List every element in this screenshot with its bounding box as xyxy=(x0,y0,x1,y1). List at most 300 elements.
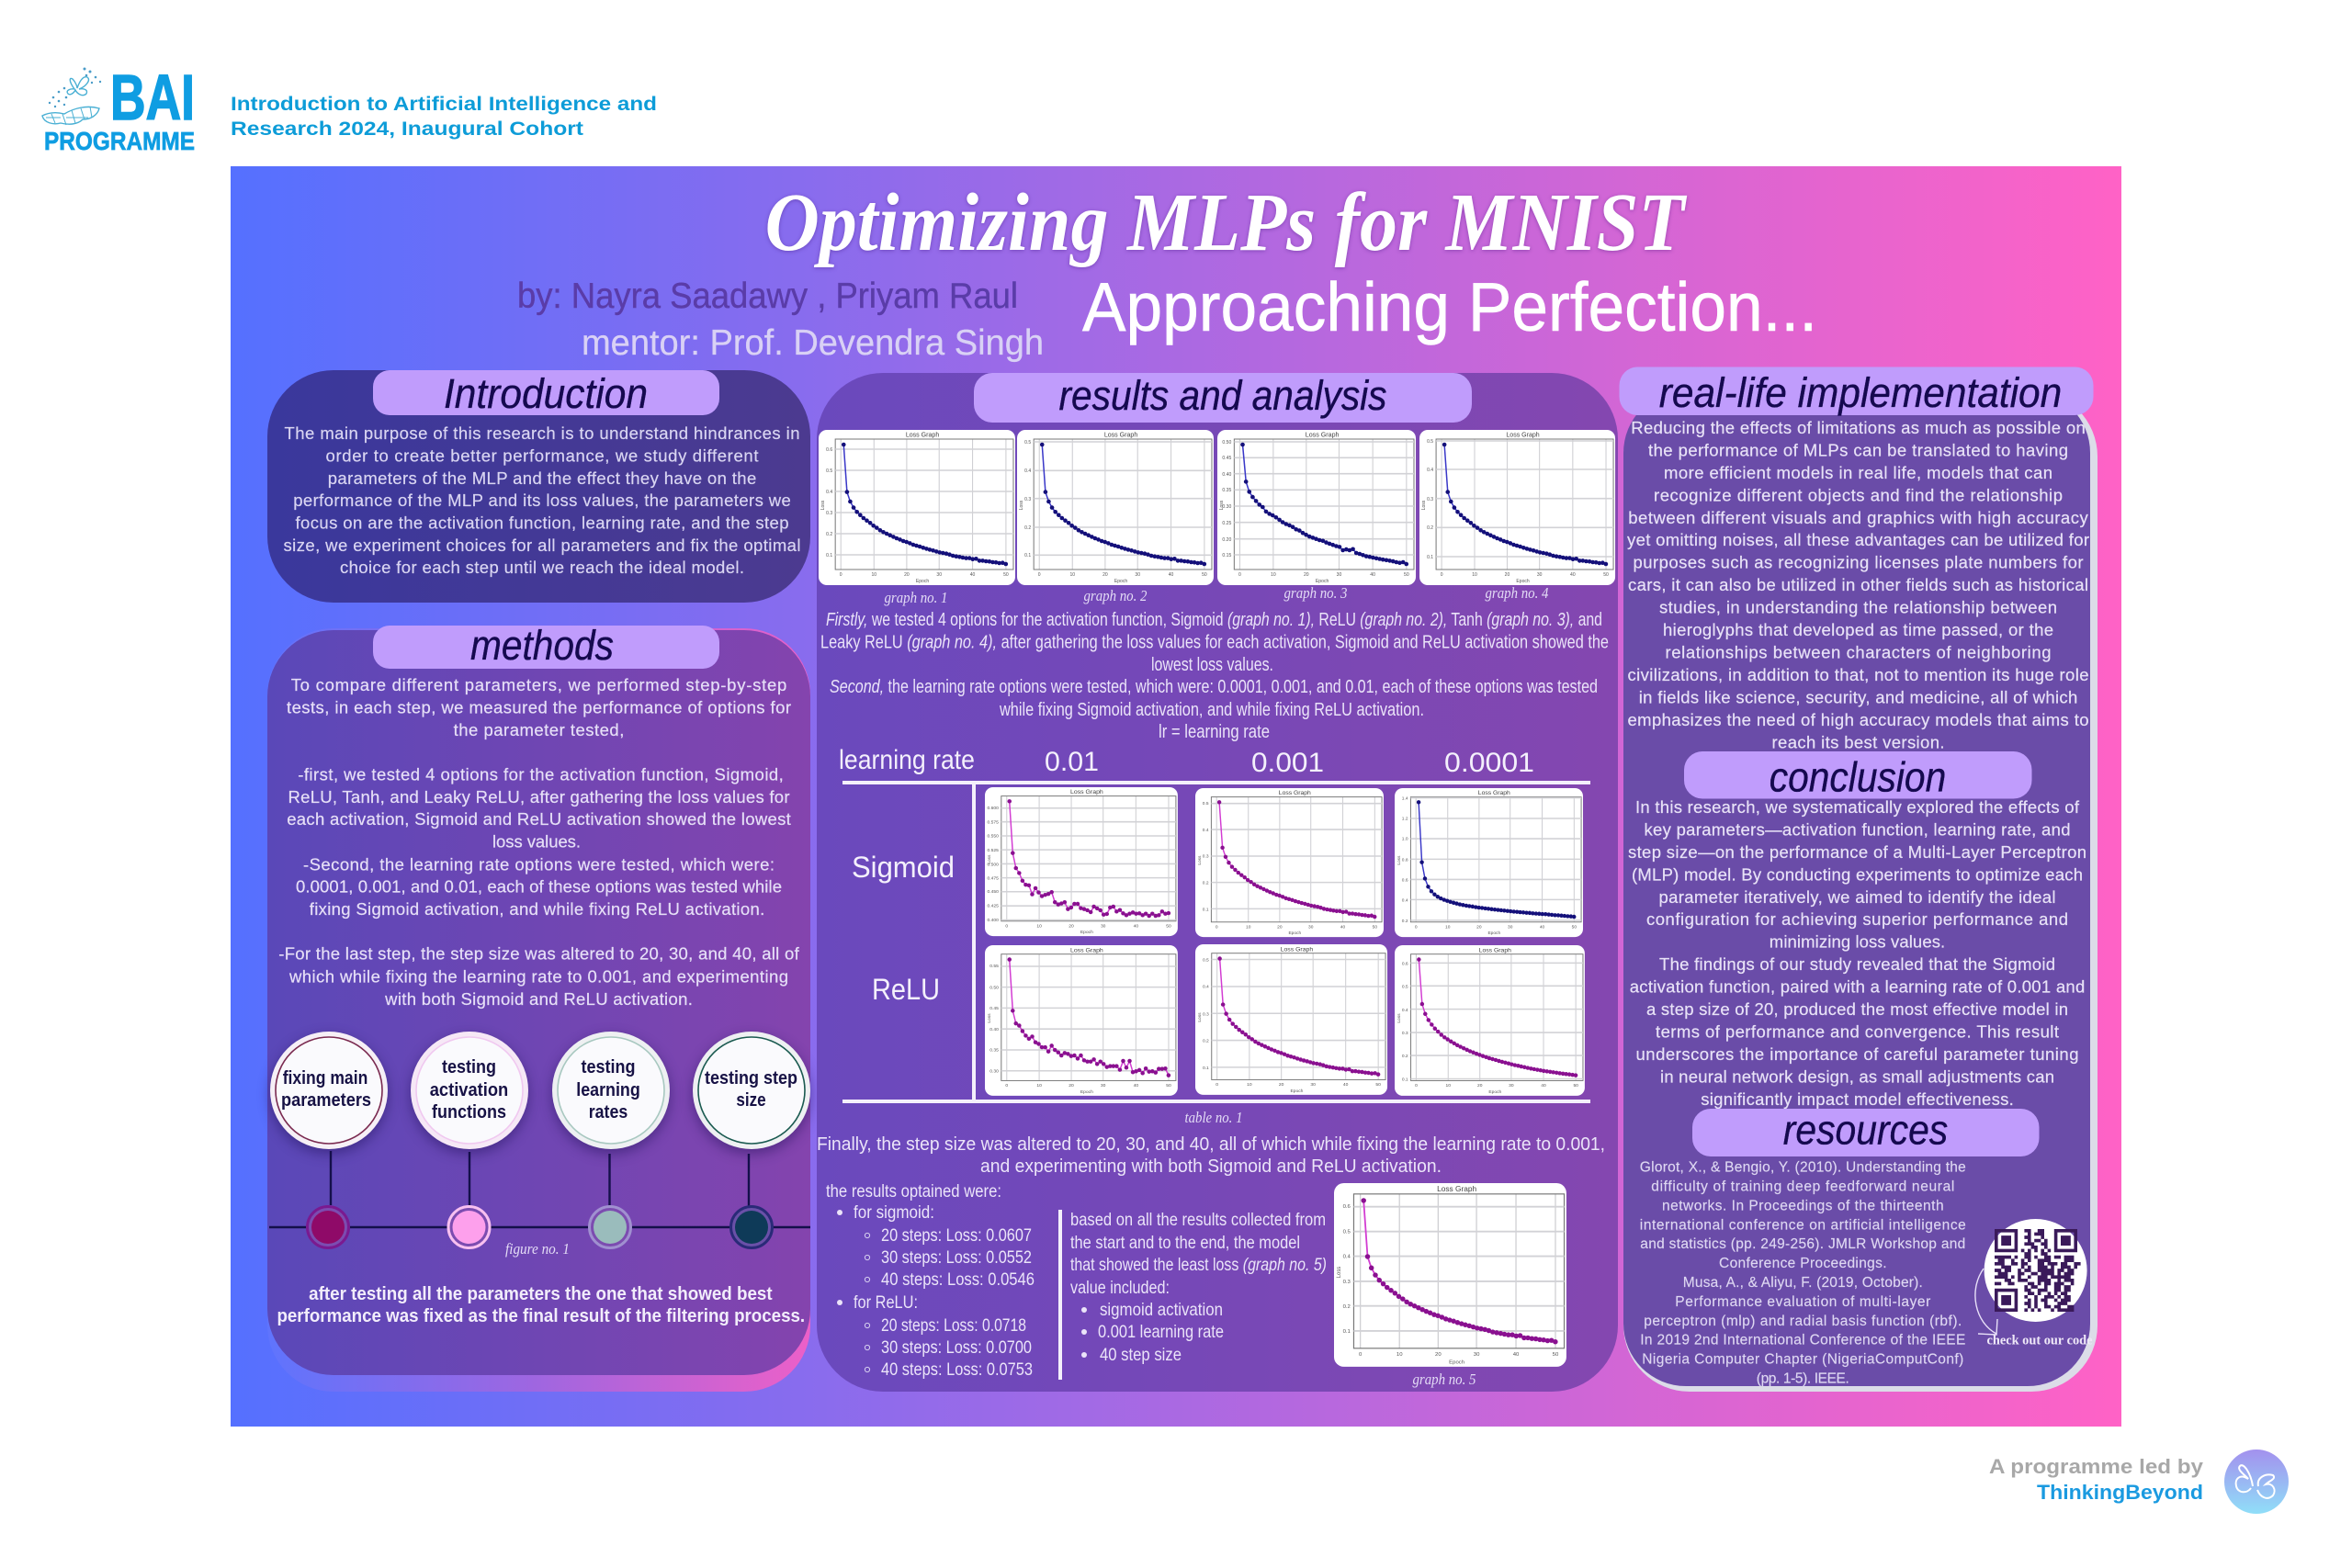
heading: Introduction: Introduction xyxy=(444,370,648,417)
chart: graph no. 3 xyxy=(1217,430,1416,585)
chart: sigmoid lr 0.001: Loss Graph xyxy=(1279,790,1311,796)
chart: graph no. 4: 0.4 xyxy=(1427,468,1433,473)
chart: sigmoid lr 0.0001 xyxy=(1395,788,1583,937)
step 2: testing activation functions: activation xyxy=(430,1080,508,1100)
chart: sigmoid lr 0.001: 20 xyxy=(1277,924,1283,930)
chart: relu lr 0.0001: 30 xyxy=(1509,1083,1514,1089)
chart: sigmoid lr 0.0001: 30 xyxy=(1508,924,1513,930)
panel: real-life, conclusion and resources xyxy=(1619,367,2098,1392)
heading: methods: methods xyxy=(470,622,614,669)
step 1: fixing main parameters: fixing main xyxy=(283,1068,368,1089)
step 4: testing step size: testing step xyxy=(705,1068,797,1089)
text: references xyxy=(1640,1160,1966,1387)
chart: sigmoid lr 0.01: 0.400 xyxy=(987,918,999,923)
text: methods body: ReLU, Tanh, and Leaky ReLU, after gathering the loss values for xyxy=(288,787,790,807)
caption: figure no. 1: figure no. 1 xyxy=(505,1240,570,1258)
chart: relu lr 0.0001: Epoch xyxy=(1488,1089,1502,1095)
chart: sigmoid lr 0.001: Epoch xyxy=(1288,931,1301,936)
text: methods body: loss values. xyxy=(492,832,581,852)
captions: graphs 1 to 4: graph no. 2 xyxy=(1084,587,1148,604)
chart: relu lr 0.01: 0.35 xyxy=(989,1047,999,1053)
heading: real-life implementation: real-life implementation xyxy=(1659,369,2062,416)
chart: graph no. 2: 0.1 xyxy=(1024,553,1031,558)
chart: sigmoid lr 0.01: 0.500 xyxy=(987,862,999,867)
chart: sigmoid lr 0.01: 0.550 xyxy=(987,834,999,840)
chart: graph no. 3: 0.45 xyxy=(1222,456,1231,461)
step 4: testing step size xyxy=(693,1032,810,1247)
chart: relu lr 0.0001: Loss Graph xyxy=(1479,947,1511,953)
text: references: Performance evaluation of multi-layer xyxy=(1675,1294,1930,1310)
text: real-life implementation body: studies, in understanding the relationship between xyxy=(1659,598,2057,617)
footer: programme credit xyxy=(1989,1450,2289,1514)
chart: graph no. 3: 0.35 xyxy=(1222,488,1231,493)
chart: graph no. 1: 50 xyxy=(1003,572,1009,578)
chart: relu lr 0.0001: 10 xyxy=(1446,1083,1451,1089)
text: conclusion body: step size—on the performance of a Multi-Layer Perceptron xyxy=(1628,842,2086,862)
chart: graph no. 1: 30 xyxy=(936,572,942,578)
chart: relu lr 0.01 xyxy=(985,945,1178,1096)
panel: methods xyxy=(267,622,810,1392)
chart: sigmoid lr 0.0001: 0.6 xyxy=(1402,878,1408,884)
chart: graph no. 2: Epoch xyxy=(1114,579,1127,584)
chart: graph no. 2: 0.3 xyxy=(1024,497,1031,502)
text: introduction body: order to create better performance, we study different xyxy=(325,446,759,465)
chart: relu lr 0.0001: 0.4 xyxy=(1402,1008,1408,1013)
step 2: testing activation functions xyxy=(411,1032,528,1247)
chart: sigmoid lr 0.001: 10 xyxy=(1246,924,1251,930)
text: conclusion body: configuration for achieving superior performance and xyxy=(1646,909,2068,929)
chart: sigmoid lr 0.001: 50 xyxy=(1373,924,1377,930)
chart: relu lr 0.01: 10 xyxy=(1036,1083,1042,1089)
text: references: and statistics (pp. 249-256). JMLR Workshop and xyxy=(1640,1236,1965,1252)
heading: results and analysis xyxy=(974,372,1472,423)
table header row: 0.001 xyxy=(1251,748,1324,778)
chart: relu lr 0.001: 0.1 xyxy=(1203,1066,1209,1071)
chart: relu lr 0.01: Loss xyxy=(987,1013,992,1023)
text: introduction body: choice for each step until we reach the ideal model. xyxy=(340,558,744,577)
chart: sigmoid lr 0.001: 0 xyxy=(1216,924,1218,930)
text: ThinkingBeyond: ThinkingBeyond xyxy=(2037,1481,2203,1504)
chart: relu lr 0.0001: 40 xyxy=(1541,1083,1546,1089)
chart: sigmoid lr 0.01: 0.600 xyxy=(987,806,999,811)
captions: graphs 1 to 4: graph no. 4 xyxy=(1485,584,1549,602)
chart: graph no. 1: 0 xyxy=(840,572,842,578)
text: references: Musa, A., & Aliyu, F. (2019, October). xyxy=(1683,1275,1923,1291)
list: results obtained: 40 steps: Loss: 0.0753 xyxy=(881,1359,1033,1380)
authors: by: Nayra Saadawy , Priyam Raul xyxy=(517,276,1018,316)
table header row: 0.01 xyxy=(1045,747,1099,777)
text: real-life implementation body: cars, it can also be utilized in other fields such as historical xyxy=(1628,575,2088,594)
chart: sigmoid lr 0.01: 50 xyxy=(1166,924,1171,929)
chart: graph no. 2: Loss Graph xyxy=(1104,433,1137,438)
chart: graph no. 1: 20 xyxy=(904,572,910,578)
chart: graph no. 4: 0.1 xyxy=(1427,555,1433,560)
text: methods body: each activation, Sigmoid and ReLU activation showed the lowest xyxy=(287,809,791,829)
text: methods body: tests, in each step, we measured the performance of options for xyxy=(287,698,791,717)
chart: relu lr 0.001: 10 xyxy=(1247,1082,1252,1088)
step 2: testing activation functions: testing xyxy=(442,1057,496,1077)
chart: relu lr 0.001 xyxy=(1195,944,1387,1095)
step 2: testing activation functions: functions xyxy=(432,1102,506,1122)
text: methods body: the parameter tested, xyxy=(454,720,624,739)
step 1: fixing main parameters: parameters xyxy=(281,1090,371,1111)
chart: sigmoid lr 0.0001: 1.0 xyxy=(1402,837,1408,842)
heading: conclusion: conclusion xyxy=(1770,753,1946,801)
chart: sigmoid lr 0.0001: 40 xyxy=(1540,924,1545,930)
chart: sigmoid lr 0.0001: 1.4 xyxy=(1402,795,1408,801)
chart: graph no. 1: 0.6 xyxy=(826,447,832,453)
chart: relu lr 0.0001 xyxy=(1395,945,1585,1096)
title: Optimizing MLPs for MNIST xyxy=(764,177,1687,268)
logo wordmark PROGRAMME: PROGRAMME xyxy=(44,127,195,155)
chart: graph no. 5: Epoch xyxy=(1449,1359,1464,1365)
arrow: QR pointer xyxy=(1975,1269,1997,1335)
header subtitle xyxy=(231,94,657,140)
chart: relu lr 0.001: 0.3 xyxy=(1203,1012,1209,1018)
chart: sigmoid lr 0.001: 0.5 xyxy=(1203,801,1209,807)
chart: graph no. 4: Loss Graph xyxy=(1506,433,1540,438)
text: activation and learning rate description: while fixing Sigmoid activation, and while fixing ReLU activation. xyxy=(999,700,1424,720)
chart: sigmoid lr 0.0001: 0.8 xyxy=(1402,858,1408,863)
chart: graph no. 2: Loss xyxy=(1019,500,1024,510)
text: methods body: -For the last step, the step size was altered to 20, 30, and 40, all of xyxy=(278,944,800,964)
text: conclusion body: The findings of our study revealed that the Sigmoid xyxy=(1659,954,2055,974)
list: results obtained: for sigmoid: xyxy=(854,1202,934,1223)
chart: graph no. 5: Loss Graph xyxy=(1437,1184,1477,1193)
chart: sigmoid lr 0.01: Epoch xyxy=(1080,930,1093,935)
heading: results and analysis: results and analysis xyxy=(1058,372,1387,419)
chart: sigmoid lr 0.001: 30 xyxy=(1308,924,1314,930)
text: real-life implementation body: between different visuals and graphics with high accuracy xyxy=(1628,508,2089,527)
chart: relu lr 0.01: 40 xyxy=(1134,1083,1138,1089)
text: methods body: To compare different parameters, we performed step-by-step xyxy=(291,675,786,694)
chart: graph no. 5: 30 xyxy=(1474,1352,1480,1358)
text: methods body xyxy=(278,675,800,1009)
chart: graph no. 3: 0.20 xyxy=(1222,537,1231,543)
chart: sigmoid lr 0.0001: 1.2 xyxy=(1402,817,1408,822)
chart: sigmoid lr 0.0001: 0.4 xyxy=(1402,898,1408,904)
chart: relu lr 0.0001: Loss xyxy=(1396,1013,1402,1023)
table header row: learning rate xyxy=(839,745,975,775)
chart: graph no. 3: Loss xyxy=(1219,500,1225,510)
chart: graph no. 2: 40 xyxy=(1169,572,1174,578)
text: real-life implementation body: hieroglyphs that developed as time passed, or the xyxy=(1663,620,2053,639)
chart: sigmoid lr 0.0001: 10 xyxy=(1445,924,1451,930)
chart: sigmoid lr 0.01: 0.450 xyxy=(987,889,999,895)
chart: sigmoid lr 0.01: Loss Graph xyxy=(1070,789,1103,795)
chart: relu lr 0.0001: 0.6 xyxy=(1402,961,1408,966)
subtitle: Approaching Perfection... xyxy=(1082,268,1817,345)
text: best model summary: value included: xyxy=(1070,1278,1170,1298)
chart: sigmoid lr 0.0001: Loss xyxy=(1396,855,1402,865)
chart: graph no. 2: 0.5 xyxy=(1024,440,1031,446)
text: real-life implementation body: Reducing the effects of limitations as much as possible on xyxy=(1631,418,2086,437)
logo wordmark BAI: BAI xyxy=(110,62,195,133)
chart: relu lr 0.01: 0 xyxy=(1005,1083,1008,1089)
chart: sigmoid lr 0.0001: Loss Graph xyxy=(1478,790,1510,796)
chart: graph no. 1: 10 xyxy=(871,572,876,578)
step 3: testing learning rates: learning xyxy=(576,1080,640,1100)
text: activation and learning rate description: Firstly, we tested 4 options for the activation function, Sigmoid (graph no. 1), ReLU (graph no. 2), Tanh (graph no. 3), and xyxy=(826,610,1602,630)
chart: sigmoid lr 0.01: 40 xyxy=(1134,924,1138,929)
text: methods body: -Second, the learning rate options were tested, which were: xyxy=(303,854,775,874)
chart: relu lr 0.0001: 0.2 xyxy=(1402,1054,1408,1059)
text: best model summary: sigmoid activation xyxy=(1100,1300,1223,1320)
chart: graph no. 5: 40 xyxy=(1513,1352,1520,1358)
text: methods conclusion xyxy=(277,1284,805,1326)
text: real-life implementation body xyxy=(1627,418,2089,751)
chart: relu lr 0.01: 0.55 xyxy=(989,964,999,969)
chart: graph no. 3: 0.15 xyxy=(1222,553,1231,558)
chart: sigmoid lr 0.0001: 0.2 xyxy=(1402,919,1408,924)
chart: graph no. 3: 0.40 xyxy=(1222,472,1231,478)
chart: graph no. 2: 50 xyxy=(1202,572,1207,578)
header subtitle: Introduction to Artificial Intelligence and xyxy=(231,94,657,115)
list: results obtained xyxy=(826,1181,1035,1380)
chart: graph no. 1: Epoch xyxy=(916,579,929,584)
chart: relu lr 0.001: 30 xyxy=(1310,1082,1316,1088)
poster background panel xyxy=(231,166,2121,1427)
heading: resources xyxy=(1692,1106,2040,1156)
text: conclusion body: key parameters—activation function, learning rate, and xyxy=(1645,819,2071,839)
chart: graph no. 3: Loss Graph xyxy=(1306,433,1340,438)
chart: graph no. 1: Loss xyxy=(820,500,826,510)
chart: sigmoid lr 0.0001: 50 xyxy=(1572,924,1577,930)
chart: relu lr 0.001: Loss xyxy=(1197,1012,1203,1022)
text: conclusion body: significantly impact model effectiveness. xyxy=(1701,1089,2014,1109)
chart: sigmoid lr 0.01: 30 xyxy=(1101,924,1106,929)
chart: relu lr 0.001: Loss Graph xyxy=(1281,946,1313,953)
chart: graph no. 5: 0.2 xyxy=(1343,1304,1351,1310)
text: conclusion body xyxy=(1628,797,2086,1109)
chart: sigmoid lr 0.001 xyxy=(1195,788,1384,937)
text: introduction body: focus on are the activation function, learning rate, and the step xyxy=(296,513,788,533)
list: results obtained: 20 steps: Loss: 0.0607 xyxy=(881,1225,1032,1246)
text: introduction body: The main purpose of this research is to understand hindrances in xyxy=(285,423,799,443)
text: real-life implementation body: civilizations, in addition to that, not to mention its huge role xyxy=(1628,665,2089,684)
step 1: fixing main parameters xyxy=(270,1032,388,1247)
text: conclusion body: minimizing loss values. xyxy=(1770,932,1945,952)
text: conclusion body: (MLP) model. By conducting experiments to optimize each xyxy=(1632,864,2083,884)
chart: sigmoid lr 0.01: 10 xyxy=(1036,924,1042,929)
text: best model summary: that showed the least loss (graph no. 5) xyxy=(1070,1255,1327,1275)
chart: graph no. 2: 0.2 xyxy=(1024,525,1031,531)
chart: relu lr 0.0001: 0.3 xyxy=(1402,1031,1408,1036)
text: introduction body: size, we experiment choices for all parameters and fix the optimal xyxy=(283,536,801,555)
chart: graph no. 4: 0.5 xyxy=(1427,439,1433,445)
mentor: mentor: Prof. Devendra Singh xyxy=(582,323,1044,363)
text: references: Glorot, X., & Bengio, Y. (2010). Understanding the xyxy=(1640,1160,1966,1176)
text: step size description xyxy=(817,1134,1605,1177)
chart: relu lr 0.001: 0.2 xyxy=(1203,1039,1209,1044)
table: learning rate vs activation xyxy=(839,745,1590,1101)
chart: relu lr 0.001: Epoch xyxy=(1290,1089,1304,1094)
text: introduction body: performance of the MLP and its loss values, the parameters we xyxy=(293,491,791,510)
text: real-life implementation body: relationships between characters of neighboring xyxy=(1665,643,2051,661)
page header: BAI logo xyxy=(42,62,195,155)
text: conclusion body: in neural network design, as small adjustments can xyxy=(1660,1066,2054,1086)
chart: relu lr 0.001: 50 xyxy=(1375,1082,1381,1088)
chart: sigmoid lr 0.01 xyxy=(985,787,1178,936)
chart: sigmoid lr 0.0001: Epoch xyxy=(1487,931,1500,936)
text: activation and learning rate description: Leaky ReLU (graph no. 4), after gathering the loss values for each activation, Sigmoid and ReLU activation showed the xyxy=(820,632,1609,652)
text: programme led by: A programme led by xyxy=(1989,1455,2204,1478)
text: best model summary: 0.001 learning rate xyxy=(1098,1322,1224,1342)
chart: graph no. 1: 40 xyxy=(970,572,976,578)
chart: graph no. 2 xyxy=(1017,430,1214,585)
step 3: testing learning rates: testing xyxy=(581,1057,636,1077)
panel: results and analysis xyxy=(817,372,1618,1392)
header subtitle: Research 2024, Inaugural Cohort xyxy=(231,118,583,140)
text: best model summary: the start and to the end, the model xyxy=(1070,1233,1300,1253)
text: real-life implementation body: in fields like science, security, and medicine, all of which xyxy=(1639,687,2077,706)
captions: graphs 1 to 4: graph no. 1 xyxy=(884,589,948,606)
chart: graph no. 5: 10 xyxy=(1396,1352,1403,1358)
chart: graph no. 1: 0.4 xyxy=(826,490,832,495)
text: references: international conference on artificial intelligence xyxy=(1640,1217,1966,1233)
text: real-life implementation body: yet omitting noises, all these advantages can be utilized for xyxy=(1627,530,2089,549)
chart: relu lr 0.01: 0.50 xyxy=(989,986,999,991)
chart: relu lr 0.0001: 0.5 xyxy=(1402,985,1408,990)
text: best model summary: based on all the results collected from xyxy=(1070,1210,1326,1230)
chart: sigmoid lr 0.001: 0.4 xyxy=(1203,828,1209,833)
chart: graph no. 3: 40 xyxy=(1370,572,1375,578)
chart: graph no. 5: 0 xyxy=(1359,1352,1363,1358)
chart: relu lr 0.0001: 50 xyxy=(1573,1083,1578,1089)
text: step size description: and experimenting with both Sigmoid and ReLU activation. xyxy=(980,1156,1442,1177)
chart: sigmoid lr 0.001: 0.1 xyxy=(1203,907,1209,912)
chart: sigmoid lr 0.01: 20 xyxy=(1069,924,1074,929)
text: conclusion body: activation function, paired with a learning rate of 0.001 and xyxy=(1630,977,2085,997)
list: results obtained: for ReLU: xyxy=(854,1292,918,1313)
caption: table no. 1: table no. 1 xyxy=(1185,1109,1242,1126)
chart: graph no. 1: 0.1 xyxy=(826,553,832,558)
chart: sigmoid lr 0.001: 0.2 xyxy=(1203,881,1209,886)
text: conclusion body: a step size of 20, produced the most effective model in xyxy=(1646,999,2068,1019)
step 3: testing learning rates xyxy=(552,1032,670,1247)
text: introduction body xyxy=(283,423,801,577)
text: introduction body: parameters of the MLP and the effect they have on the xyxy=(328,468,756,488)
row label: Sigmoid: Sigmoid xyxy=(852,851,955,884)
chart: graph no. 4: Epoch xyxy=(1516,579,1530,584)
chart: sigmoid lr 0.0001: 20 xyxy=(1476,924,1482,930)
row label: ReLU: ReLU xyxy=(872,973,940,1006)
text: references: In 2019 2nd International Conference of the IEEE xyxy=(1640,1333,1965,1348)
text: activation and learning rate description: lr = learning rate xyxy=(1159,722,1270,742)
chart: graph no. 5: 50 xyxy=(1553,1352,1559,1358)
chart: relu lr 0.01: 20 xyxy=(1069,1083,1074,1089)
text: activation and learning rate description xyxy=(820,610,1609,742)
chart: graph no. 1: 0.3 xyxy=(826,511,832,516)
chart: sigmoid lr 0.01: Loss xyxy=(987,854,992,864)
chart: graph no. 4: 30 xyxy=(1537,572,1543,578)
panel: introduction xyxy=(267,370,810,603)
text: conclusion body: In this research, we systematically explored the effects of xyxy=(1635,797,2080,817)
text: references: networks. In Proceedings of the thirteenth xyxy=(1662,1198,1944,1213)
text: methods body: 0.0001, 0.001, and 0.01, each of these options was tested while xyxy=(296,877,782,897)
chart: graph no. 1: Loss Graph xyxy=(906,433,939,438)
heading: methods xyxy=(373,622,719,669)
chart: relu lr 0.01: 50 xyxy=(1166,1083,1171,1089)
chart: graph no. 5: 0.4 xyxy=(1343,1255,1351,1260)
chart: sigmoid lr 0.01: 0 xyxy=(1005,924,1008,929)
chart: graph no. 3: 30 xyxy=(1337,572,1341,578)
step 3: testing learning rates: rates xyxy=(589,1102,628,1122)
text: real-life implementation body: reach its best version. xyxy=(1771,732,1944,751)
icon: butterfly sketch xyxy=(42,68,101,125)
chart: graph no. 4: 40 xyxy=(1570,572,1576,578)
text: references: perceptron (mlp) and radial basis function (rbf). xyxy=(1644,1314,1962,1329)
text: references: difficulty of training deep feedforward neural xyxy=(1651,1179,1954,1194)
heading: Introduction xyxy=(373,370,719,417)
text: methods conclusion: after testing all the parameters the one that showed best xyxy=(309,1284,773,1304)
chart: graph no. 5: 0.3 xyxy=(1343,1280,1351,1285)
chart: graph no. 4: 0 xyxy=(1441,572,1443,578)
list: results obtained: 20 steps: Loss: 0.0718 xyxy=(881,1315,1026,1336)
chart: graph no. 5: 20 xyxy=(1435,1352,1442,1358)
chart: relu lr 0.0001: 0.1 xyxy=(1402,1077,1408,1082)
text: activation and learning rate description: lowest loss values. xyxy=(1151,655,1273,675)
chart: graph no. 3: 50 xyxy=(1404,572,1409,578)
chart: relu lr 0.01: Loss Graph xyxy=(1070,947,1103,953)
chart: graph no. 4: 0.2 xyxy=(1427,525,1433,531)
chart: relu lr 0.01: Epoch xyxy=(1080,1089,1093,1095)
chart: graph no. 2: 10 xyxy=(1069,572,1075,578)
icon: ThinkingBeyond butterfly xyxy=(2224,1450,2289,1514)
captions: graphs 1 to 4: graph no. 3 xyxy=(1284,584,1347,602)
chart: relu lr 0.001: 20 xyxy=(1279,1082,1284,1088)
chart: graph no. 3: 0 xyxy=(1238,572,1241,578)
chart: graph no. 5: 0.1 xyxy=(1343,1329,1351,1335)
chart: relu lr 0.001: 40 xyxy=(1343,1082,1349,1088)
text: conclusion body: parameter iteratively, we aimed to identify the ideal xyxy=(1659,887,2056,907)
figure: process timeline xyxy=(269,1032,810,1247)
chart: sigmoid lr 0.001: 0.3 xyxy=(1203,854,1209,860)
chart: graph no. 5: Loss xyxy=(1337,1267,1342,1278)
text: real-life implementation body: more efficient models in real life, models that can xyxy=(1664,463,2052,482)
heading: conclusion xyxy=(1684,751,2032,801)
text: conclusion body: underscores the importance of careful parameter tuning xyxy=(1635,1044,2078,1064)
chart: sigmoid lr 0.01: 0.425 xyxy=(987,903,999,908)
chart: graph no. 2: 0 xyxy=(1038,572,1041,578)
chart: graph no. 2: 20 xyxy=(1102,572,1108,578)
chart: graph no. 4 xyxy=(1419,430,1615,585)
caption: graph no. 5: graph no. 5 xyxy=(1413,1371,1476,1388)
text: methods body: -first, we tested 4 options for the activation function, Sigmoid, xyxy=(298,765,784,784)
heading: resources: resources xyxy=(1783,1106,1948,1154)
chart: graph no. 1 xyxy=(819,430,1015,585)
chart: graph no. 4: 0.3 xyxy=(1427,497,1433,502)
chart: relu lr 0.001: 0.4 xyxy=(1203,985,1209,990)
chart: graph no. 3: 0.30 xyxy=(1222,504,1231,510)
list: results obtained: 30 steps: Loss: 0.0552 xyxy=(881,1247,1032,1268)
step 4: testing step size: size xyxy=(736,1090,766,1111)
chart: relu lr 0.01: 0.45 xyxy=(989,1006,999,1011)
chart: relu lr 0.01: 0.30 xyxy=(989,1069,999,1075)
text: best model summary: 40 step size xyxy=(1100,1345,1182,1365)
table header row: 0.0001 xyxy=(1444,748,1534,778)
chart: graph no. 2: 0.4 xyxy=(1024,468,1031,474)
chart: relu lr 0.0001: 20 xyxy=(1477,1083,1483,1089)
chart: graph no. 3: Epoch xyxy=(1316,579,1329,584)
text: references: Conference Proceedings. xyxy=(1719,1256,1887,1271)
chart: sigmoid lr 0.0001: 0 xyxy=(1415,924,1418,930)
chart: graph no. 3: 0.50 xyxy=(1222,440,1231,446)
chart: graph no. 2: 30 xyxy=(1135,572,1140,578)
chart: graph no. 3: 20 xyxy=(1304,572,1309,578)
text: check out our code: check out our code xyxy=(1986,1334,2093,1348)
chart: relu lr 0.01: 30 xyxy=(1101,1083,1106,1089)
